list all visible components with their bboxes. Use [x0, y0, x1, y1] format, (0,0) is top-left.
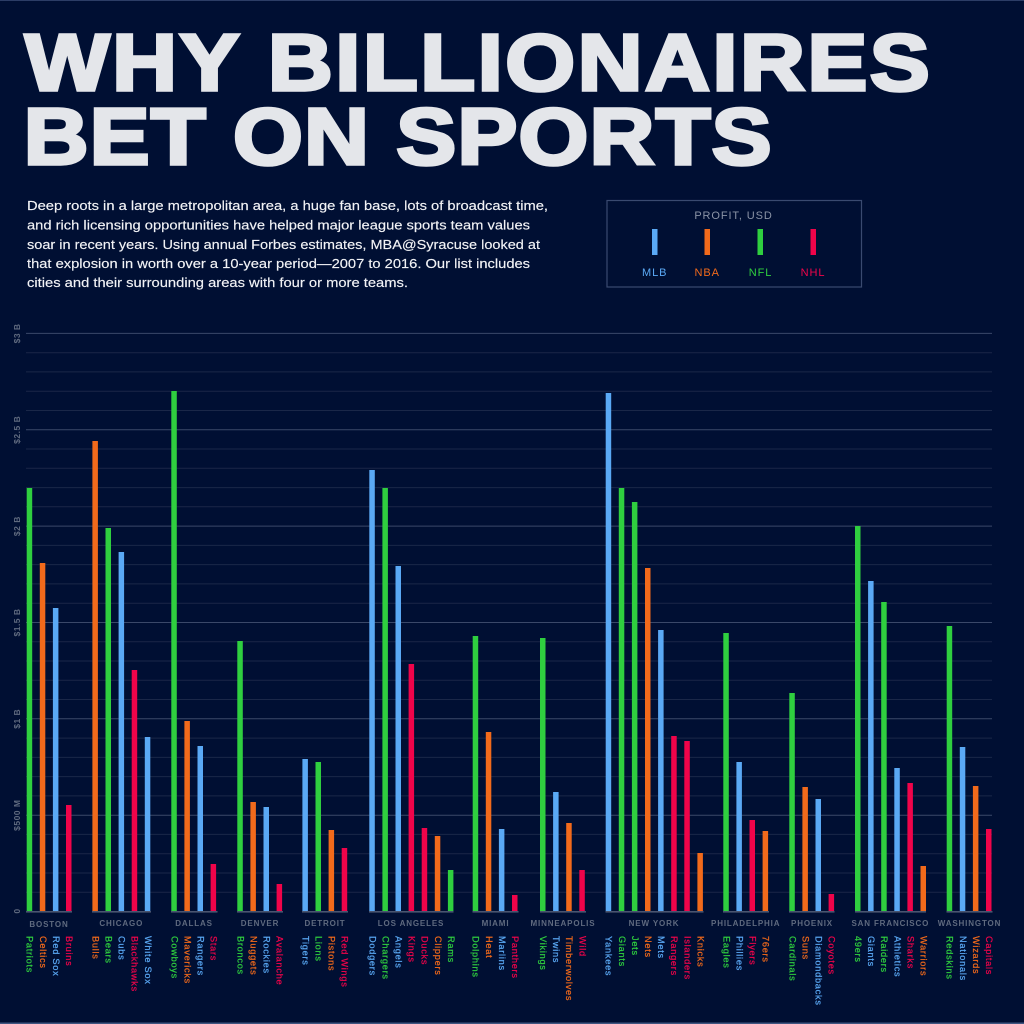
team: Dodgers: Dodgers [367, 936, 377, 976]
team: Knicks: Knicks [695, 936, 705, 968]
team: Bulls [90, 441, 100, 960]
city group: Denver [235, 641, 285, 985]
y axis labels: 0 [12, 908, 22, 914]
team: Ducks [420, 828, 430, 965]
team: Bruins [64, 805, 74, 966]
team: Red Sox [51, 608, 61, 976]
team: Marlins [497, 829, 507, 971]
team: Mavericks: Mavericks [182, 936, 192, 984]
team: Diamondbacks: Diamondbacks [814, 936, 824, 1006]
intro text block: Deep roots in a large metropolitan area, a huge fan base, lots of broadcast time, [27, 198, 548, 213]
team: Coyotes [827, 894, 837, 975]
team: Clippers [433, 836, 443, 976]
team: Heat [484, 732, 494, 958]
team: White Sox [143, 737, 153, 985]
team: Mavericks [182, 721, 192, 984]
team: Ducks: Ducks [420, 936, 430, 965]
team: Vikings [538, 638, 548, 971]
legend: profit, USD: NFL [749, 267, 772, 279]
y axis labels: $2.5 B [12, 416, 22, 444]
team: Nuggets: Nuggets [248, 936, 258, 975]
team: Twins [551, 792, 561, 963]
team: Nets [643, 568, 653, 958]
team: Chargers [380, 488, 390, 980]
team: Tigers: Tigers [300, 936, 310, 966]
team: Nationals [958, 747, 968, 981]
city group: Detroit: DETROIT [304, 919, 346, 928]
team: Cubs: Cubs [117, 936, 127, 960]
team: 76ers [761, 831, 771, 963]
team: Redskins: Redskins [945, 936, 955, 980]
team: Wild [577, 870, 587, 957]
team: Flyers: Flyers [748, 936, 758, 965]
city group: Detroit [300, 759, 350, 988]
team: Timberwolves [564, 823, 574, 1001]
team: Angels [394, 566, 404, 969]
team: Bears [104, 528, 114, 964]
intro text block: that explosion in worth over a 10-year period—2007 to 2016. Our list includes [27, 256, 530, 271]
intro text block: cities and their surrounding areas with four or more teams. [27, 275, 408, 290]
team: Flyers [748, 820, 758, 965]
team: Nets: Nets [643, 936, 653, 958]
intro text block: and rich licensing opportunities have helped major league sports team values [27, 218, 530, 232]
city group: San Francisco: SAN FRANCISCO [851, 919, 929, 928]
intro text block: soar in recent years. Using annual Forbes estimates, MBA@Syracuse looked at [27, 237, 540, 252]
team: Athletics [892, 768, 902, 977]
team: Patriots: Patriots [25, 936, 35, 973]
team: Red Wings: Red Wings [340, 936, 350, 988]
team: Wild: Wild [577, 936, 587, 957]
city group: Los Angeles [367, 470, 456, 980]
team: Avalanche [275, 884, 285, 985]
team: Giants: Giants [617, 936, 627, 967]
city group: New York [604, 393, 705, 980]
team: Mets [656, 630, 666, 959]
team: Rockies [262, 807, 272, 974]
team: Eagles: Eagles [721, 936, 731, 969]
team: 49ers [853, 526, 863, 963]
team: Rangers: Rangers [196, 936, 206, 976]
team: Cubs [117, 552, 127, 960]
y axis labels: $500 M [12, 800, 22, 831]
title: WHY BILLIONAIRES [25, 17, 932, 107]
city group: Dallas: DALLAS [175, 919, 213, 928]
city group: San Francisco [851, 526, 929, 977]
team: Heat: Heat [484, 936, 494, 958]
team: Timberwolves: Timberwolves [564, 936, 574, 1001]
team: Broncos: Broncos [235, 936, 245, 975]
team: Rams [446, 870, 456, 963]
team: Bruins: Bruins [64, 936, 74, 966]
team: Lions [314, 762, 324, 962]
title: BET ON SPORTS [24, 91, 773, 181]
city group: Minneapolis [531, 638, 595, 1001]
city group: Denver: DENVER [241, 919, 279, 928]
team: Clippers: Clippers [433, 936, 443, 976]
team: Dodgers [367, 470, 377, 976]
y axis labels: $2 B [12, 516, 22, 536]
team: Angels: Angels [394, 936, 404, 969]
team: Warriors: Warriors [918, 936, 928, 976]
team: Broncos [235, 641, 245, 975]
team: Diamondbacks [814, 799, 824, 1006]
team: Warriors [918, 866, 928, 976]
legend: profit, USD: NBA [695, 267, 720, 279]
team: Stars [209, 864, 219, 961]
team: Raiders: Raiders [879, 936, 889, 973]
team: Red Wings [340, 848, 350, 988]
city group: Los Angeles: LOS ANGELES [378, 919, 444, 928]
city group: Phoenix [787, 693, 837, 1006]
team: Kings [407, 664, 417, 963]
team: Dolphins [471, 636, 481, 978]
team: Panthers [510, 895, 520, 979]
team: Cowboys [169, 391, 179, 979]
team: Jets: Jets [630, 936, 640, 956]
team: Suns [800, 787, 810, 960]
team: Rangers [196, 746, 206, 976]
team: Chargers: Chargers [380, 936, 390, 980]
team: Phillies: Phillies [734, 936, 744, 971]
city group: Phoenix: PHOENIX [791, 919, 833, 928]
legend: profit, USD: NHL [801, 267, 825, 279]
team: 76ers: 76ers [761, 936, 771, 963]
team: Wizards [971, 786, 981, 974]
y axis labels: $1.5 B [12, 608, 22, 637]
team: Rockies: Rockies [262, 936, 272, 974]
city group: Miami: MIAMI [482, 919, 509, 928]
team: Knicks [695, 853, 705, 968]
team: Sharks: Sharks [905, 936, 915, 969]
team: Red Sox: Red Sox [51, 936, 61, 976]
y axis labels: $1 B [12, 709, 22, 729]
team: Vikings: Vikings [538, 936, 548, 971]
team: Rams: Rams [446, 936, 456, 963]
team: Sharks [905, 783, 915, 969]
team: Giants: Giants [866, 936, 876, 967]
team: Coyotes: Coyotes [827, 936, 837, 975]
city group: Chicago [90, 441, 153, 992]
team: Nuggets [248, 802, 258, 975]
team: Bears: Bears [104, 936, 114, 964]
team: Yankees: Yankees [604, 936, 614, 976]
team: Tigers [300, 759, 310, 966]
team: Wizards: Wizards [971, 936, 981, 974]
team: Nationals: Nationals [958, 936, 968, 981]
team: Jets [630, 502, 640, 956]
team: Celtics [38, 563, 48, 969]
intro text block [27, 198, 548, 290]
team: Cardinals [787, 693, 797, 981]
team: Stars: Stars [209, 936, 219, 961]
team: Eagles [721, 633, 731, 969]
team: Raiders [879, 602, 889, 973]
team: Giants [617, 488, 627, 967]
legend: profit, USD: PROFIT, USD [694, 210, 773, 222]
team: Capitals [984, 829, 994, 975]
city group: Boston: BOSTON [29, 920, 69, 929]
city group: Chicago: CHICAGO [99, 919, 143, 928]
city group: Philadelphia [711, 633, 780, 971]
legend: profit, USD: MLB [642, 267, 667, 279]
team: Blackhawks: Blackhawks [130, 936, 140, 992]
team: Rangers [669, 736, 679, 976]
team: Mets: Mets [656, 936, 666, 959]
team: Patriots [25, 488, 35, 973]
team: Pistons: Pistons [327, 936, 337, 971]
team: Yankees [604, 393, 614, 976]
legend: profit, USD [607, 200, 862, 287]
team: Giants [866, 581, 876, 967]
city group: Boston [25, 488, 74, 976]
team: Panthers: Panthers [510, 936, 520, 979]
city group: Minneapolis: MINNEAPOLIS [531, 919, 595, 928]
team: Islanders [682, 741, 692, 980]
team: Blackhawks [130, 670, 140, 992]
team: Cowboys: Cowboys [169, 936, 179, 979]
y axis labels: $3 B [12, 323, 22, 343]
team: Islanders: Islanders [682, 936, 692, 980]
city group: Philadelphia: PHILADELPHIA [711, 919, 780, 928]
team: Dolphins: Dolphins [471, 936, 481, 978]
city group: Miami [471, 636, 520, 979]
team: Rangers: Rangers [669, 936, 679, 976]
city group: New York: NEW YORK [629, 919, 679, 928]
team: Pistons [327, 830, 337, 971]
team: Suns: Suns [800, 936, 810, 960]
city group: Dallas [169, 391, 219, 984]
y axis labels [12, 323, 22, 914]
city group: Washington: WASHINGTON [938, 919, 1001, 928]
city group: Washington [938, 626, 1001, 981]
team: Cardinals: Cardinals [787, 936, 797, 981]
team: Twins: Twins [551, 936, 561, 963]
team: Avalanche: Avalanche [275, 936, 285, 985]
team: Phillies [734, 762, 744, 971]
team: Bulls: Bulls [90, 936, 100, 960]
team: White Sox: White Sox [143, 936, 153, 985]
team: Capitals: Capitals [984, 936, 994, 975]
team: Kings: Kings [407, 936, 417, 963]
team: Marlins: Marlins [497, 936, 507, 971]
team: Lions: Lions [314, 936, 324, 962]
team: 49ers: 49ers [853, 936, 863, 963]
team: Athletics: Athletics [892, 936, 902, 977]
title [24, 17, 932, 181]
team: Celtics: Celtics [38, 936, 48, 969]
team: Redskins [945, 626, 955, 980]
